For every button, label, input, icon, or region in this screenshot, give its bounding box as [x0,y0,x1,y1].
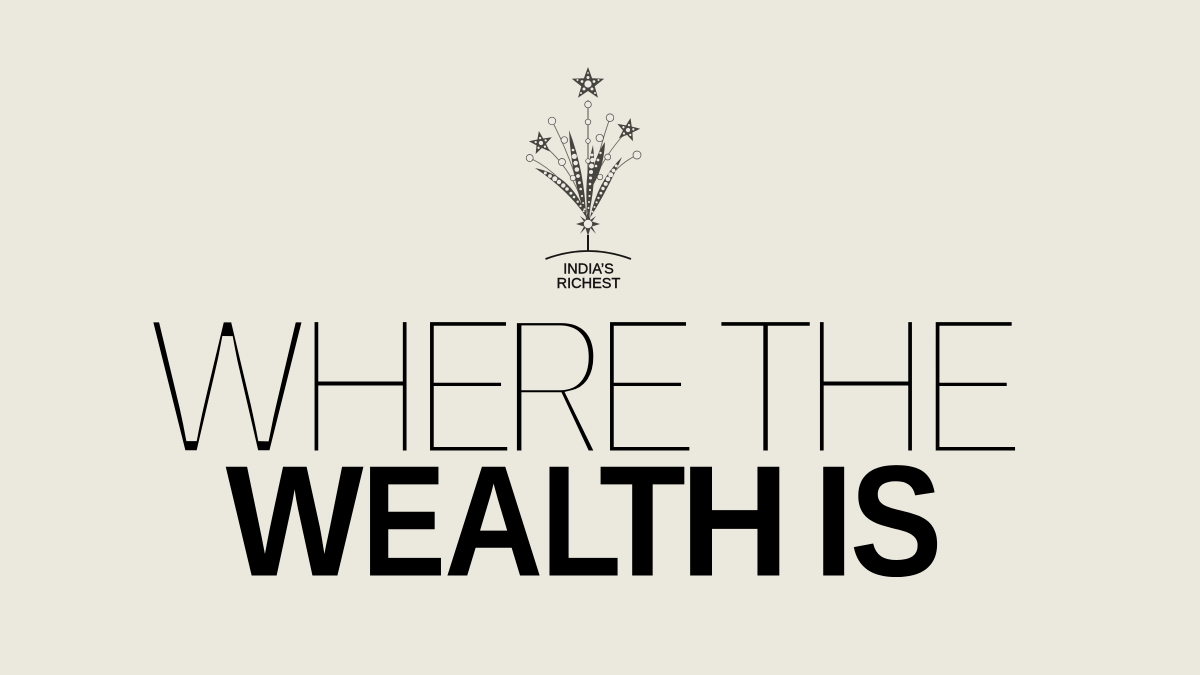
emblem: jewel dots [526,101,641,213]
heading line 2: WEALTH IS (bold): A [444,434,543,610]
heading line 1: WHERE THE (thin) [146,272,1028,501]
emblem: top star [572,67,604,98]
emblem: base star [576,211,600,236]
heading line 2: WEALTH IS (bold): S [850,432,943,609]
heading line 1: WHERE THE (thin): E [410,272,523,500]
heading line 2: WEALTH IS (bold): I [814,434,854,610]
logo: India's Richest firework emblem [526,67,642,292]
heading line 1: WHERE THE (thin): T [711,272,820,500]
heading line 1: WHERE THE (thin): E [590,272,703,500]
heading line 1: WHERE THE (thin): H [797,272,934,500]
heading line 1: WHERE THE (thin): H [292,272,429,500]
logo text: INDIA’S [563,262,614,278]
heading line 2: WEALTH IS (bold): H [680,433,790,609]
emblem: stems and connecting lines [530,100,637,225]
emblem: post and ground arc [546,235,631,259]
emblem: blades [535,130,622,218]
heading line 2: WEALTH IS (bold): E [362,433,446,610]
emblem: left star [527,129,554,155]
heading line 1: WHERE THE (thin): W [146,273,309,501]
heading line 2: WEALTH IS (bold): L [541,433,622,609]
heading line 1: WHERE THE (thin): R [500,273,609,501]
heading line 2: WEALTH IS (bold) [226,432,943,610]
heading line 2: WEALTH IS (bold): T [599,433,686,609]
emblem: right star [615,116,642,142]
heading line 1: WHERE THE (thin): E [916,272,1028,500]
heading line 2: WEALTH IS (bold): W [226,433,364,610]
logo: India's Richest firework emblem: RICHEST [557,276,620,292]
